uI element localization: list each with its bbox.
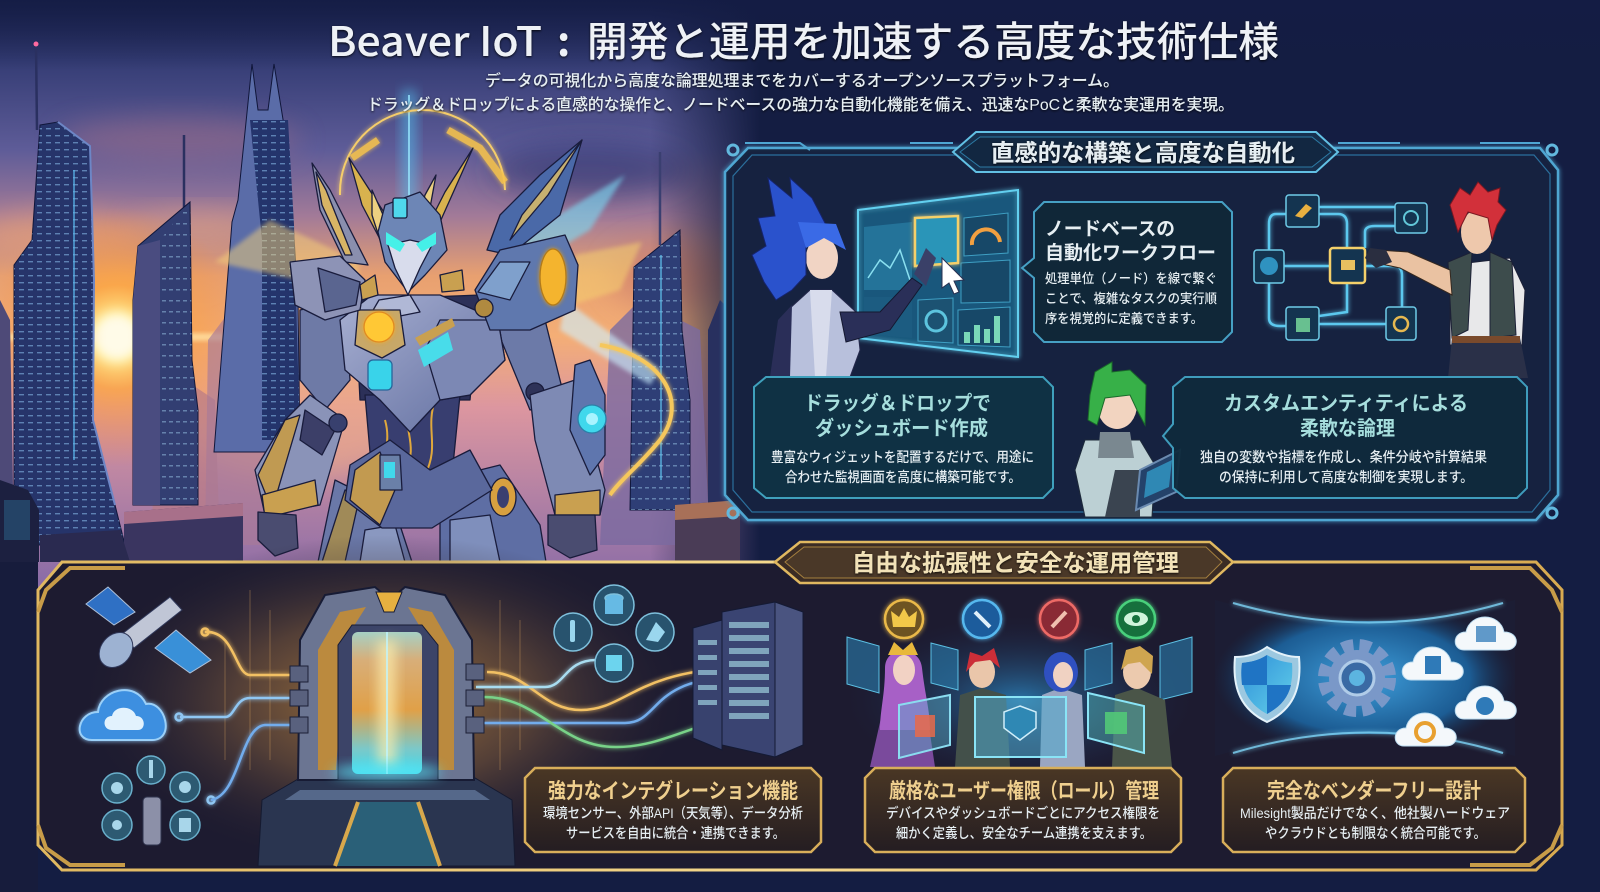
portal gate	[258, 587, 515, 866]
tower: central spire	[214, 64, 300, 452]
glass security panes	[899, 695, 950, 758]
title: Beaver IoT	[328, 8, 542, 68]
vendor clouds	[1395, 617, 1516, 746]
callout: drag and drop dashboard	[754, 377, 1053, 498]
city skyline	[0, 42, 740, 892]
callout: user roles: デバイスやダッシュボードごとにアクセス権限を	[886, 805, 1160, 821]
callout: node based workflow: ことで、複雑なタスクの実行順	[1045, 291, 1217, 306]
heading plate: 直感的な構築と高度な自動化	[991, 140, 1295, 166]
callout: drag and drop dashboard: 豊富なウィジェットを配置するだけで、用途に	[771, 449, 1034, 465]
backdrop circuit traces	[225, 590, 520, 770]
sun with lens flare	[0, 207, 327, 467]
node flow diagram	[1254, 195, 1427, 340]
character: green haired engineer	[1075, 362, 1180, 517]
foreground rooftops	[0, 480, 740, 892]
callout: custom entity logic: の保持に利用して高度な制御を実現します。	[1219, 469, 1473, 485]
callout: drag and drop dashboard: 合わせた監視画面を高度に構築可能です。	[785, 469, 1021, 485]
halo and energy beams	[215, 90, 672, 495]
heading plate: 自由な拡張性と安全な運用管理	[852, 550, 1179, 576]
robot mech	[215, 90, 672, 562]
callout: node based workflow: 自動化ワークフロー	[1045, 242, 1216, 264]
callout: drag and drop dashboard: ドラッグ＆ドロップで	[804, 391, 991, 415]
callout: drag and drop dashboard: ダッシュボード作成	[815, 416, 988, 440]
callout: vendor free design: 完全なベンダーフリー設計	[1267, 779, 1481, 803]
head with horns	[349, 148, 473, 295]
callout: integration: 強力なインテグレーション機能	[548, 779, 798, 803]
panel frame	[725, 148, 1558, 520]
role team illustration	[845, 600, 1195, 785]
callout: vendor free design: Milesight製品だけでなく、他社製ハードウェア	[1240, 805, 1510, 821]
gate backdrop glow	[85, 535, 685, 865]
title: :	[557, 8, 570, 68]
legs	[318, 465, 546, 562]
callout: integration	[525, 768, 821, 852]
vendor free illustration	[1215, 600, 1516, 756]
callout: user roles	[865, 768, 1181, 852]
shield icon	[1234, 647, 1300, 722]
callout: custom entity logic: 柔軟な論理	[1300, 417, 1395, 440]
cloud icon	[80, 690, 166, 740]
callout: user roles: 細かく定義し、安全なチーム連携を支えます。	[896, 825, 1152, 841]
panel: extensibility and secure operation	[38, 535, 1562, 870]
sensor icon group	[102, 756, 200, 845]
subtitle line 1: データの可視化から高度な論理処理までをカバーするオープンソースプラットフォーム。	[485, 71, 1119, 90]
gear icon	[1325, 646, 1389, 710]
character: red haired man	[1365, 182, 1528, 378]
corner gears	[728, 145, 1557, 518]
callout: custom entity logic: カスタムエンティティによる	[1224, 392, 1468, 415]
callout: integration: 環境センサー、外部API（天気等）、データ分析	[543, 805, 803, 821]
dashboard hologram	[858, 190, 1018, 357]
right arm with shield	[497, 320, 606, 558]
title: 開発と運用を加速する高度な技術仕様	[587, 9, 1279, 68]
heading plate	[775, 542, 1233, 583]
panel: intuitive build and automation	[725, 132, 1558, 520]
callout: custom entity logic	[1163, 377, 1527, 498]
torso	[340, 295, 505, 528]
shoulders	[290, 235, 578, 330]
left arm	[255, 300, 350, 556]
team characters	[870, 642, 1172, 767]
server rack	[693, 602, 803, 757]
callout: custom entity logic: 独自の変数や指標を作成し、条件分岐や計算結果	[1200, 449, 1487, 465]
callout: integration: サービスを自由に統合・連携できます。	[566, 825, 785, 841]
wings	[312, 140, 582, 265]
tower: right skyscraper	[630, 152, 740, 520]
heading plate	[953, 132, 1338, 172]
holographic side panels	[847, 637, 1192, 700]
role badges	[885, 600, 1155, 638]
callout: node based workflow: ノードベースの	[1045, 219, 1175, 240]
callout: user roles: 厳格なユーザー権限（ロール）管理	[889, 780, 1159, 803]
callout: node based workflow: 序を視覚的に定義できます。	[1045, 311, 1203, 326]
tower: left skyscraper	[14, 42, 125, 545]
character: blue haired woman	[752, 178, 936, 377]
callout: node based workflow: 処理単位（ノード）を線で繋ぐ	[1045, 271, 1217, 286]
pane lock icons	[915, 693, 1144, 757]
satellite icon	[86, 587, 211, 674]
integration wires	[176, 628, 734, 804]
callout: vendor free design: やクラウドとも制限なく統合可能です。	[1265, 825, 1486, 841]
service icon cluster	[554, 585, 674, 682]
callout: vendor free design	[1223, 768, 1525, 852]
subtitle line 2: ドラッグ＆ドロップによる直感的な操作と、ノードベースの強力な自動化機能を備え、迅速なPoCと柔軟な実運用を実現。	[367, 96, 1234, 114]
callout: node based workflow	[1022, 202, 1232, 342]
gold frame	[38, 562, 1562, 870]
tower: second skyscraper	[133, 135, 198, 505]
